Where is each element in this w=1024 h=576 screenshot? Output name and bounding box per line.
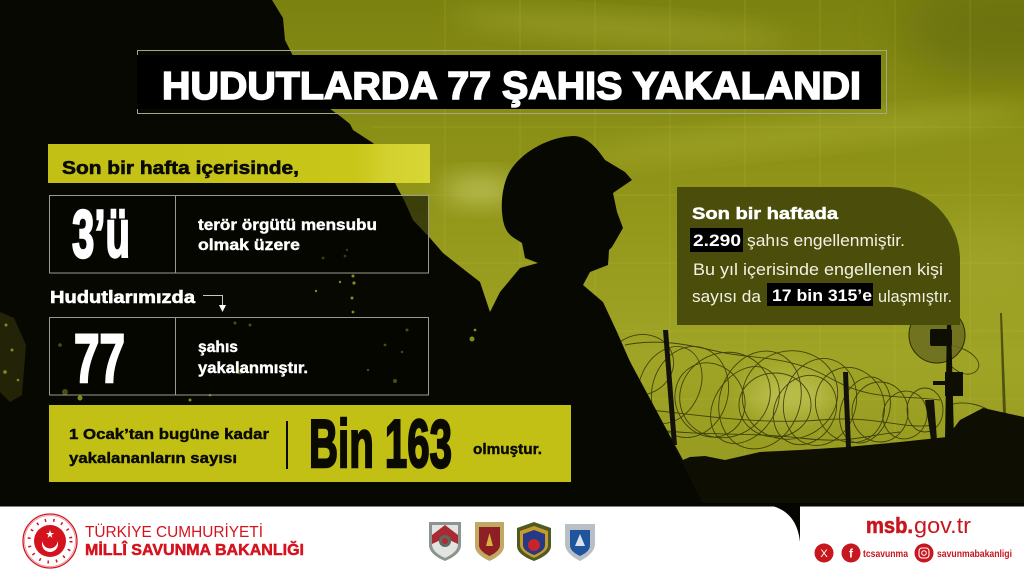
- panel: Bin 163 total: 1 Ocak’tan bugüne kadar: [69, 426, 269, 443]
- ground silhouette: [620, 343, 1024, 510]
- panel: weekly prevented: 2.290: [693, 231, 741, 250]
- ministry name: TÜRKİYE CUMHURİYETİ: [85, 522, 263, 541]
- panel: 77 şahıs: 77: [74, 320, 125, 397]
- panel: weekly prevented: 17 bin 315’e: [772, 286, 872, 305]
- panel: 77 şahıs: yakalanmıştır.: [198, 360, 308, 377]
- panel: weekly prevented: Son bir haftada: [692, 204, 839, 223]
- panel: 3'ü terör örgütü: terör örgütü mensubu: [198, 217, 377, 234]
- panel: 77 şahıs: şahıs: [198, 339, 238, 356]
- panel: Bin 163 total: olmuştur.: [473, 442, 542, 458]
- panel: weekly prevented: sayısı da: [692, 287, 762, 306]
- social icons and handles: tcsavunma: [863, 549, 908, 560]
- icon: land forces badge: [429, 522, 461, 561]
- website: msb.: [866, 513, 913, 538]
- panel: 77 şahıs: [50, 318, 428, 397]
- panel: weekly prevented: [677, 187, 960, 325]
- title text: HUDUTLARDA 77 ŞAHIS YAKALANDI: [162, 65, 861, 108]
- social icons and handles: X: [820, 548, 828, 560]
- panel: 3'ü terör örgütü: olmak üzere: [198, 237, 300, 254]
- fence posts: [663, 330, 937, 448]
- social icons and handles: f: [849, 546, 854, 560]
- radar dish and mast: [909, 307, 1006, 440]
- tree silhouette: [0, 0, 500, 510]
- soldier silhouette: [480, 136, 706, 510]
- panel: Son bir hafta heading: [48, 144, 430, 183]
- social icons and handles: savunmabakanligi: [937, 549, 1012, 560]
- barbed wire coils: [598, 325, 995, 461]
- panel: weekly prevented: ulaşmıştır.: [878, 287, 952, 306]
- panel: 3'ü terör örgütü: 3’ü: [72, 196, 130, 272]
- footer band: [0, 503, 1024, 576]
- title banner: [137, 50, 886, 114]
- panel: Bin 163 total: [49, 405, 571, 482]
- icon: gendarmerie badge: [475, 522, 504, 561]
- panel: Son bir hafta heading: Son bir hafta içerisinde,: [62, 157, 299, 178]
- social icons and handles: [814, 544, 1012, 562]
- ministry name: [85, 522, 304, 559]
- icon: coast guard badge: [517, 522, 551, 561]
- heading: Hudutlarımızda with arrow: [50, 287, 226, 312]
- icon: ministry emblem: [23, 514, 77, 568]
- panel: Bin 163 total: Bin 163: [309, 406, 452, 482]
- panel: Bin 163 total: yakalananların sayısı: [69, 450, 237, 467]
- panel: weekly prevented: Bu yıl içerisinde engellenen kişi: [693, 260, 943, 279]
- foliage speckles: [0, 249, 476, 402]
- panel: 3'ü terör örgütü: [50, 196, 428, 273]
- panel: weekly prevented: şahıs engellenmiştir.: [747, 231, 905, 250]
- website: gov.tr: [914, 513, 971, 538]
- heading: Hudutlarımızda with arrow: Hudutlarımızda: [50, 287, 195, 307]
- website: [866, 513, 971, 538]
- icon: police badge: [565, 524, 595, 561]
- ministry name: MİLLÎ SAVUNMA BAKANLIĞI: [85, 540, 304, 559]
